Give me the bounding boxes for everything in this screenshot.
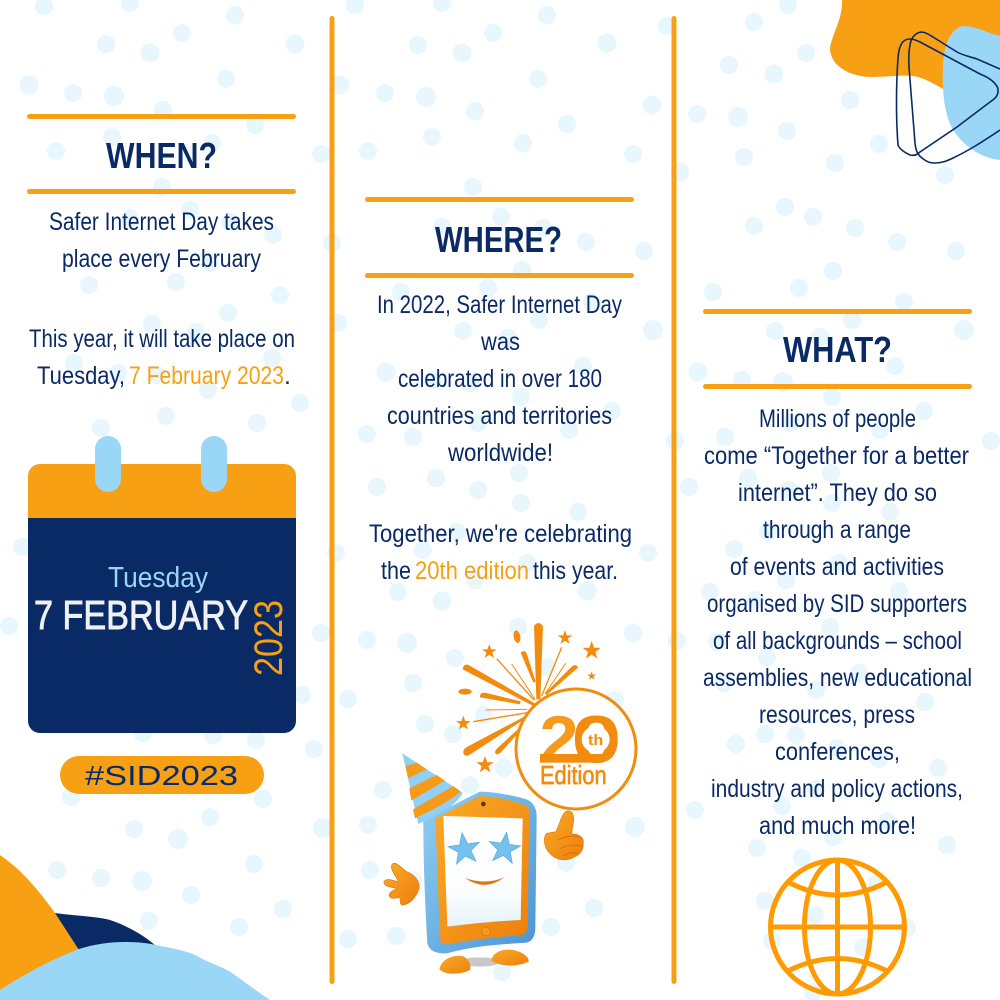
icon: calendar (28, 436, 296, 733)
badge: 20th edition: Edition (540, 760, 607, 790)
icon: globe (770, 860, 904, 994)
text block: where body: was (480, 328, 520, 356)
blob: top-right decoration (830, 0, 1000, 163)
text block: what body: come “Together for a better (704, 442, 969, 470)
divider: left column rule (330, 16, 334, 984)
text block: where body: In 2022, Safer Internet Day (377, 291, 622, 319)
text block: when body (29, 208, 295, 390)
badge: 20th edition: 0 (571, 704, 621, 778)
text block: when body: . (284, 362, 291, 390)
text block: when body: 7 February 2023 (129, 362, 284, 390)
icon: fireworks (456, 623, 601, 772)
heading: when: WHEN? (106, 135, 217, 176)
panel: what (703, 309, 972, 840)
blob: bottom-left decoration (0, 855, 270, 1000)
text block: where body: 20th edition (415, 557, 529, 585)
icon: party hat (402, 753, 463, 824)
text block: where body: the (381, 557, 411, 585)
text block: when body: This year, it will take place on (29, 325, 295, 353)
text block: what body: of events and activities (730, 553, 944, 581)
hashtag pill (60, 756, 264, 794)
icon: star eyes and smile (446, 830, 522, 885)
text block: where body: this year. (533, 557, 618, 585)
heading: what: WHAT? (783, 329, 892, 370)
text block: when body: Safer Internet Day takes (49, 208, 274, 236)
icon: calendar: Tuesday (108, 562, 208, 594)
text block: where body: countries and territories (387, 402, 612, 430)
badge: 20th edition: th (588, 732, 603, 749)
text block: what body: Millions of people (759, 405, 916, 433)
divider: right column rule (672, 16, 676, 984)
icon: thumbs up hand (544, 811, 583, 860)
text block: where body (369, 291, 632, 585)
text block: what body: through a range (763, 516, 911, 544)
icon: feet (439, 950, 529, 974)
text block: what body: and much more! (759, 812, 916, 840)
icon: calendar: 7 FEBRUARY (34, 592, 248, 638)
text block: where body: Together, we're celebrating (369, 520, 632, 548)
hashtag pill: #SID2023 (85, 760, 238, 791)
panel: when (27, 114, 296, 390)
text block: what body: conferences, (775, 738, 900, 766)
text block: when body: place every February (62, 245, 261, 273)
panel: where (365, 197, 634, 585)
icon: calendar: 2023 (247, 600, 291, 676)
text block: where body: celebrated in over 180 (398, 365, 602, 393)
badge: 20th edition (516, 689, 636, 809)
text block: what body: resources, press (759, 701, 915, 729)
badge: 20th edition: 2 (539, 704, 579, 778)
illustration: 20th edition tablet mascot (384, 623, 636, 974)
text block: when body: Tuesday, (37, 362, 125, 390)
text block: what body (703, 405, 972, 840)
heading: where: WHERE? (435, 219, 562, 260)
text block: where body: worldwide! (447, 439, 553, 467)
icon: tablet body (423, 792, 537, 953)
icon: waving hand (384, 863, 419, 905)
text block: what body: internet”. They do so (738, 479, 937, 507)
